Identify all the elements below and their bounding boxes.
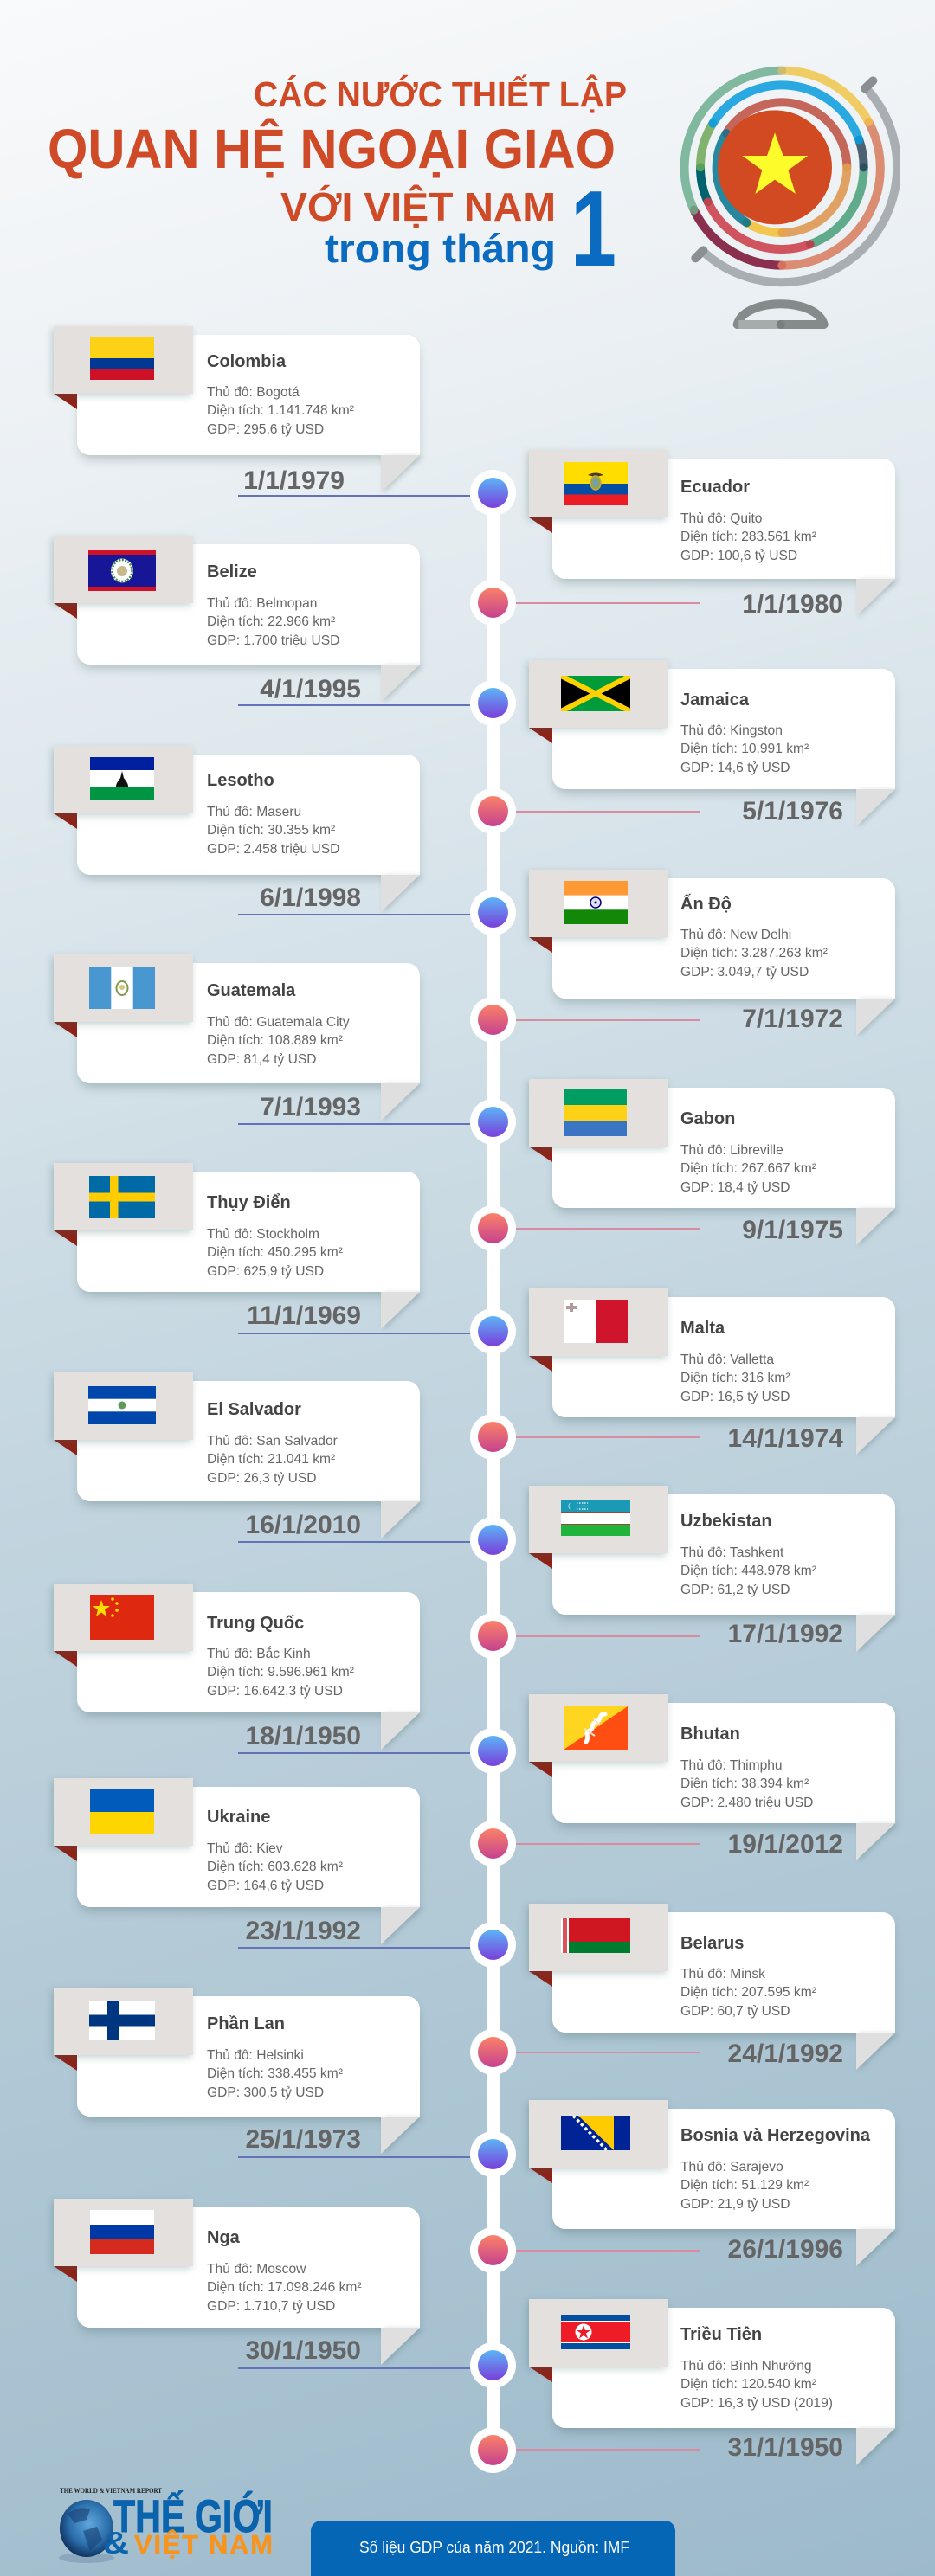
connector line (238, 495, 470, 497)
country name: Uzbekistan (680, 1512, 772, 1531)
country facts: Diện tích: 51.129 km² (680, 2178, 809, 2193)
date: Belize: 4/1/1995 (260, 675, 361, 703)
country facts: Diện tích: 603.628 km² (207, 1860, 343, 1874)
connector line (238, 704, 470, 706)
card: Jamaica (524, 659, 899, 826)
country facts: Diện tích: 120.540 km² (680, 2377, 816, 2392)
country facts (680, 511, 816, 563)
timeline node (470, 2029, 516, 2075)
card: Gabon (524, 1078, 899, 1245)
flag: Colombia (90, 337, 154, 380)
timeline node (470, 1414, 516, 1460)
country facts: Thủ đô: Sarajevo (680, 2160, 783, 2175)
flag: Belize (88, 550, 156, 591)
flag: China (90, 1595, 154, 1640)
country name: Nga (207, 2228, 240, 2247)
country facts: Diện tích: 338.455 km² (207, 2066, 343, 2081)
country facts (207, 1015, 350, 1067)
country facts: Diện tích: 17.098.246 km² (207, 2280, 362, 2295)
country name: Ukraine (207, 1808, 270, 1827)
country name: Jamaica (680, 691, 749, 710)
country name: Belarus (680, 1934, 744, 1953)
country facts (680, 1758, 813, 1810)
country facts: Diện tích: 30.355 km² (207, 823, 335, 838)
connector line (516, 1019, 700, 1021)
connector line (238, 1123, 470, 1125)
country name: Belize (207, 562, 257, 581)
date: Ukraine: 23/1/1992 (246, 1917, 361, 1945)
country facts: Diện tích: 207.595 km² (680, 1985, 816, 2000)
connector line (238, 914, 470, 915)
flag: India (564, 881, 628, 924)
date: Nga: 30/1/1950 (246, 2336, 361, 2365)
country facts: Thủ đô: Bình Nhưỡng (680, 2359, 812, 2374)
timeline node (470, 2427, 516, 2473)
flag: Ukraine (90, 1789, 154, 1834)
country name: Ecuador (680, 478, 750, 497)
country facts: GDP: 18,4 tỷ USD (680, 1180, 790, 1195)
connector line (516, 1635, 700, 1637)
country facts: GDP: 16,5 tỷ USD (680, 1390, 790, 1404)
country facts: GDP: 2.458 triệu USD (207, 842, 339, 857)
date: Phần Lan: 25/1/1973 (246, 2125, 361, 2154)
date: Jamaica: 5/1/1976 (742, 797, 843, 825)
card: Thụy Điển (48, 1162, 423, 1329)
connector line (238, 1333, 470, 1334)
date: Ấn Độ: 7/1/1972 (742, 1005, 843, 1033)
country facts: Diện tích: 316 km² (680, 1371, 790, 1385)
source note: Số liệu GDP của năm 2021. Nguồn: IMF (359, 2539, 629, 2556)
country facts: Diện tích: 450.295 km² (207, 1245, 343, 1260)
country facts: Thủ đô: Guatemala City (207, 1015, 350, 1030)
date: Uzbekistan: 17/1/1992 (728, 1620, 843, 1648)
connector line (516, 1843, 700, 1845)
country facts: GDP: 61,2 tỷ USD (680, 1583, 790, 1597)
country facts: Diện tích: 448.978 km² (680, 1564, 816, 1578)
card: Bosnia và Herzegovina (525, 2100, 899, 2266)
country name: Trung Quốc (207, 1614, 304, 1633)
flag: Malta (564, 1300, 628, 1343)
timeline node (470, 2227, 516, 2273)
country facts: Thủ đô: San Salvador (207, 1434, 338, 1449)
country facts (207, 805, 339, 857)
connector line (516, 811, 700, 813)
date: Guatemala: 7/1/1993 (260, 1093, 361, 1121)
country name: Colombia (207, 352, 286, 371)
country facts: Thủ đô: Libreville (680, 1143, 783, 1158)
country name: Phần Lan (207, 2014, 285, 2033)
country facts (207, 2048, 343, 2100)
flag: Sweden (89, 1176, 155, 1218)
flag: Finland (89, 2001, 155, 2040)
date: Belarus: 24/1/1992 (728, 2040, 843, 2068)
connector line (516, 2052, 700, 2053)
country facts (207, 385, 354, 437)
country facts: Diện tích: 21.041 km² (207, 1452, 335, 1467)
flag: Russia (90, 2210, 154, 2254)
card: Phần Lan (49, 1988, 422, 2154)
country facts (680, 723, 809, 775)
card: Triều Tiên (525, 2299, 899, 2465)
flag: Gabon (564, 1089, 627, 1136)
country name: El Salvador (207, 1400, 301, 1419)
country facts (207, 1841, 343, 1893)
country name: Guatemala (207, 981, 295, 1000)
connector line (238, 1947, 470, 1949)
country facts: Thủ đô: Stockholm (207, 1227, 319, 1242)
timeline node (470, 997, 516, 1043)
title line: quan hệ ngoại giao: QUAN HỆ NGOẠI GIAO (48, 117, 616, 180)
country name: Bhutan (680, 1725, 740, 1744)
title line: các nước thiết lập: CÁC NƯỚC THIẾT LẬP (254, 74, 627, 114)
logo tagline: THE WORLD & VIETNAM REPORT (60, 2487, 163, 2495)
timeline node (470, 580, 516, 626)
timeline node (470, 1517, 516, 1563)
country facts: GDP: 16,3 tỷ USD (2019) (680, 2396, 833, 2411)
country facts (207, 2262, 362, 2314)
date: Triều Tiên: 31/1/1950 (728, 2433, 843, 2462)
card: Nga (49, 2199, 422, 2365)
country facts: Thủ đô: Bắc Kinh (207, 1647, 311, 1661)
logo name: việt nam: VIỆT NAM (134, 2528, 273, 2560)
country name: Malta (680, 1319, 725, 1338)
country facts: Thủ đô: Tashkent (680, 1545, 783, 1560)
country facts: GDP: 1.710,7 tỷ USD (207, 2299, 335, 2314)
connector line (516, 602, 700, 604)
date: Trung Quốc: 18/1/1950 (246, 1722, 361, 1751)
connector line (516, 1436, 700, 1438)
card: Lesotho (48, 745, 424, 912)
country facts (207, 596, 339, 648)
connector line (238, 1752, 470, 1754)
timeline node (470, 1728, 516, 1774)
country facts: Diện tích: 1.141.748 km² (207, 403, 354, 418)
card: Bhutan (525, 1694, 899, 1860)
country facts: Thủ đô: Kingston (680, 723, 783, 738)
date: Lesotho: 6/1/1998 (260, 883, 361, 912)
logo ampersand: & (103, 2525, 129, 2560)
connector line (516, 1228, 700, 1230)
country facts: GDP: 1.700 triệu USD (207, 633, 339, 648)
flag: Guatemala (89, 967, 155, 1009)
timeline node (470, 1613, 516, 1659)
country facts: Thủ đô: Bogotá (207, 385, 300, 400)
country facts: Thủ đô: Minsk (680, 1967, 765, 1982)
date: Thụy Điển: 11/1/1969 (247, 1301, 361, 1330)
country facts: Diện tích: 267.667 km² (680, 1161, 816, 1176)
flag: Bhutan (564, 1706, 628, 1750)
country facts (680, 2160, 809, 2212)
date: Bhutan: 19/1/2012 (728, 1830, 843, 1859)
icon: globe with Vietnam flag (680, 66, 900, 329)
country facts: Diện tích: 9.596.961 km² (207, 1665, 354, 1680)
title line: với việt nam: VỚI VIỆT NAM (280, 184, 556, 229)
flag: Jamaica (561, 676, 630, 711)
country facts (207, 1227, 343, 1279)
country facts: GDP: 26,3 tỷ USD (207, 1471, 317, 1486)
country facts: Thủ đô: Maseru (207, 805, 301, 819)
card: Belize (48, 535, 424, 703)
timeline node (470, 1099, 516, 1145)
country facts (207, 1434, 338, 1486)
country facts (680, 1967, 816, 2019)
connector line (516, 2250, 700, 2252)
country facts: Thủ đô: Kiev (207, 1841, 283, 1856)
country facts: Diện tích: 3.287.263 km² (680, 946, 828, 960)
connector line (238, 2367, 470, 2369)
card: El Salvador (48, 1372, 423, 1539)
country facts (680, 2357, 833, 2412)
card: Ecuador (524, 449, 899, 616)
country facts: Diện tích: 283.561 km² (680, 530, 816, 544)
country name: Bosnia và Herzegovina (680, 2126, 870, 2145)
country facts: GDP: 164,6 tỷ USD (207, 1879, 324, 1893)
flag: Belarus (561, 1918, 630, 1953)
country name: Lesotho (207, 771, 274, 790)
country facts (680, 1352, 790, 1404)
timeline node (470, 1922, 516, 1968)
country facts: GDP: 295,6 tỷ USD (207, 422, 324, 437)
country facts: GDP: 3.049,7 tỷ USD (680, 965, 809, 980)
date: Bosnia: 26/1/1996 (728, 2235, 843, 2264)
flag: Uzbekistan (561, 1500, 630, 1536)
card: Trung Quốc (48, 1584, 423, 1750)
connector line (238, 1541, 470, 1543)
card: Malta (524, 1288, 899, 1455)
connector line (516, 2449, 700, 2451)
country facts: Diện tích: 108.889 km² (207, 1033, 343, 1048)
logo globe (60, 2500, 113, 2557)
date: Malta: 14/1/1974 (728, 1424, 843, 1453)
timeline node (470, 680, 516, 726)
connector line (238, 2156, 470, 2158)
flag: El Salvador (88, 1386, 156, 1424)
country name: Thụy Điển (207, 1193, 291, 1212)
date: Ecuador: 1/1/1980 (742, 590, 843, 619)
country facts: Diện tích: 38.394 km² (680, 1776, 809, 1791)
title line: trong tháng: trong tháng (325, 226, 556, 271)
card: Uzbekistan (525, 1485, 899, 1652)
timeline spine (487, 493, 500, 2450)
flag: Lesotho (90, 757, 154, 800)
logo: Thế Giới & Việt Nam (52, 2482, 286, 2568)
country name: Triều Tiên (680, 2325, 762, 2344)
country name: Ấn Độ (680, 895, 732, 914)
card: Ukraine (49, 1778, 422, 1944)
card: Colombia (48, 325, 424, 493)
country facts (680, 928, 828, 980)
date: Gabon: 9/1/1975 (742, 1216, 843, 1244)
country facts: Thủ đô: Quito (680, 511, 762, 526)
country facts: GDP: 14,6 tỷ USD (680, 761, 790, 775)
date: El Salvador: 16/1/2010 (246, 1511, 361, 1539)
country facts (207, 1646, 354, 1699)
card: Ấn Độ (524, 869, 899, 1036)
timeline node (470, 2131, 516, 2177)
card: Guatemala (48, 954, 423, 1121)
country facts: Diện tích: 22.966 km² (207, 614, 335, 629)
country facts: GDP: 60,7 tỷ USD (680, 2004, 790, 2019)
timeline node (470, 890, 516, 935)
country facts: Thủ đô: Thimphu (680, 1758, 783, 1773)
timeline node (470, 1821, 516, 1866)
title (48, 74, 627, 286)
timeline node (470, 470, 516, 516)
country facts: GDP: 81,4 tỷ USD (207, 1052, 317, 1067)
country facts: Thủ đô: Moscow (207, 2262, 306, 2277)
country facts: GDP: 2.480 triệu USD (680, 1795, 813, 1810)
flag: North Korea (561, 2315, 630, 2349)
country facts: Thủ đô: Belmopan (207, 596, 317, 611)
title numeral 1: 1 (571, 170, 616, 286)
flag: Ecuador (564, 462, 628, 505)
country facts: Thủ đô: New Delhi (680, 928, 791, 942)
country facts: GDP: 16.642,3 tỷ USD (207, 1684, 343, 1699)
country facts: Thủ đô: Valletta (680, 1352, 774, 1367)
country facts: GDP: 300,5 tỷ USD (207, 2085, 324, 2100)
timeline node (470, 2342, 516, 2388)
country name: Gabon (680, 1109, 735, 1128)
country facts: GDP: 100,6 tỷ USD (680, 549, 797, 563)
flag: Bosnia (561, 2116, 630, 2150)
timeline node (470, 1308, 516, 1354)
country facts: Diện tích: 10.991 km² (680, 742, 809, 756)
date: Colombia: 1/1/1979 (243, 466, 345, 495)
country facts: GDP: 21,9 tỷ USD (680, 2197, 790, 2212)
source note (311, 2521, 675, 2576)
timeline node (470, 1205, 516, 1251)
timeline node (470, 788, 516, 834)
country facts: GDP: 625,9 tỷ USD (207, 1264, 324, 1279)
card: Belarus (525, 1904, 899, 2070)
country facts (680, 1143, 816, 1195)
country facts (680, 1545, 816, 1597)
country facts: Thủ đô: Helsinki (207, 2048, 304, 2063)
